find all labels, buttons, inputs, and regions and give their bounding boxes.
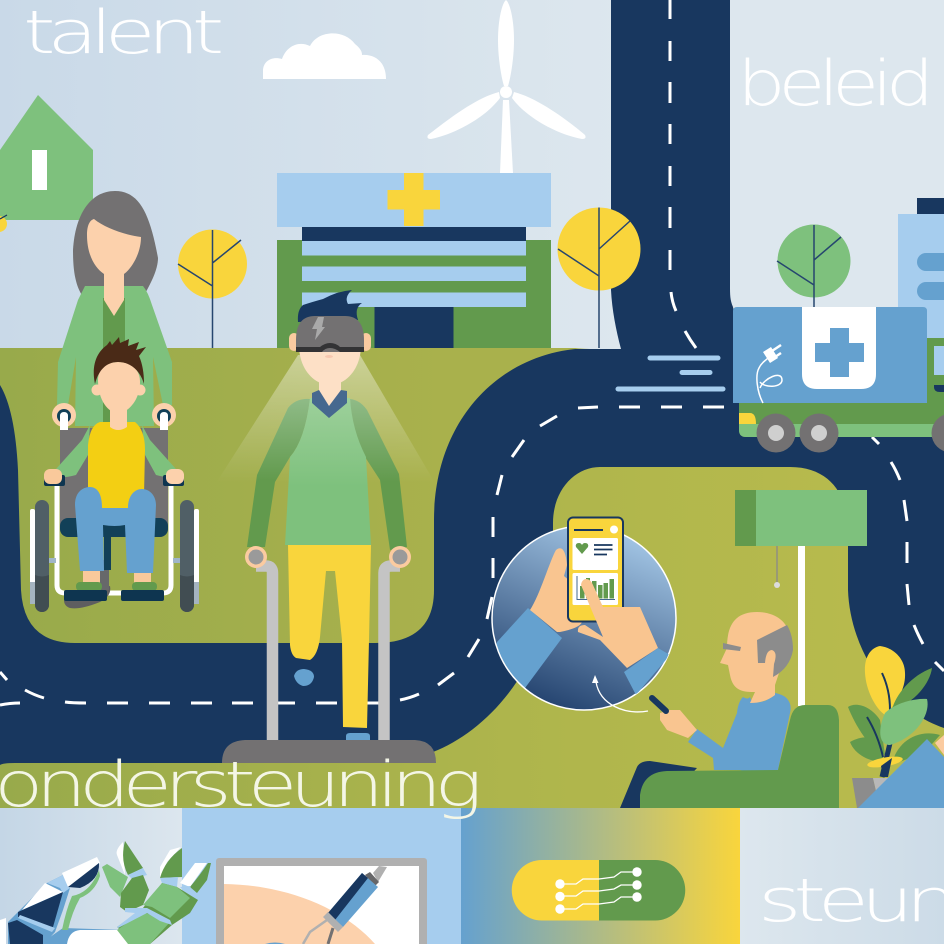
- carer hair: [73, 191, 158, 297]
- icon: electric plug: [757, 345, 782, 403]
- carer face: [87, 219, 141, 316]
- child neck and head: [92, 337, 146, 430]
- city building: [898, 198, 944, 344]
- head: [720, 612, 790, 703]
- sweater: [285, 398, 371, 545]
- icon: medical cross: [815, 328, 864, 377]
- carer and child in wheelchair: [30, 191, 199, 612]
- disc outline: [492, 526, 676, 710]
- left hand: [530, 548, 582, 632]
- elderly man in armchair: [620, 612, 839, 808]
- sky panel: [0, 0, 621, 349]
- hand with phone: [652, 698, 697, 738]
- carer jacket: [57, 286, 172, 426]
- hands on walker: [245, 546, 411, 568]
- pill capsule: [512, 860, 599, 920]
- glasses: [723, 643, 741, 651]
- icon: wind turbine: [427, 0, 586, 173]
- heading: ondersteuning: ondersteuning: [0, 748, 477, 821]
- truck wheels: [756, 414, 944, 452]
- bottom right figure corner: [858, 735, 944, 808]
- surgical instrument: [265, 866, 387, 944]
- right hand pointing: [578, 579, 658, 668]
- right sky panel: [730, 0, 944, 345]
- yellow trousers: [288, 545, 371, 728]
- lawn right and bottom: [0, 467, 944, 808]
- lawn left: [0, 348, 590, 643]
- icon: partial yellow tree: [0, 215, 7, 232]
- trouser leg: [620, 761, 697, 808]
- VR light cone: [216, 355, 435, 483]
- icon: green house: [0, 95, 93, 220]
- truck chassis: [739, 403, 944, 437]
- truck box: [733, 307, 927, 403]
- bar chart: [577, 576, 615, 600]
- skin tissue: [224, 884, 375, 944]
- hair: [298, 290, 362, 322]
- icon: cloud: [263, 33, 386, 79]
- child arms: [56, 425, 176, 477]
- neck and collar: [312, 375, 347, 418]
- icon: heart: [576, 543, 588, 554]
- monitor: [216, 858, 427, 944]
- electric ambulance truck: [733, 307, 944, 452]
- icon: yellow tree left: [178, 230, 247, 348]
- arrow from phone to magnifier: [592, 675, 648, 712]
- walker base: [222, 740, 436, 763]
- heading: steun: steun: [758, 866, 944, 936]
- icon: hospital cross: [388, 173, 440, 226]
- smartphone health app magnifier: [490, 518, 676, 712]
- floor lamp: [735, 490, 867, 706]
- phone: [568, 518, 623, 622]
- panel: left sky tile: [0, 808, 182, 944]
- panel: robotic surgery screen: [182, 808, 461, 944]
- white cross panel: [802, 307, 876, 389]
- VR headset: [296, 316, 364, 352]
- icon: yellow tree right: [558, 208, 640, 348]
- person with VR headset and walker: [216, 290, 436, 763]
- grey hair: [757, 625, 793, 677]
- left sleeve: [247, 399, 310, 547]
- prosthetic foot and shoe: [294, 669, 370, 741]
- icon: lightning bolt: [312, 317, 325, 340]
- child hands and armrests: [44, 469, 184, 486]
- road centre dashes: [0, 0, 944, 705]
- right sleeve: [624, 648, 670, 695]
- walker poles: [256, 566, 400, 745]
- heading: beleid: beleid: [737, 47, 927, 120]
- wheelchair back: [60, 428, 168, 528]
- wheelchair handles: [52, 403, 176, 430]
- sweater: [688, 693, 791, 773]
- armchair: [640, 705, 839, 808]
- truck cab: [925, 338, 944, 404]
- child shirt: [88, 422, 145, 509]
- lower palm: [0, 870, 135, 944]
- hospital building: [277, 173, 551, 348]
- right sleeve: [350, 399, 407, 550]
- child legs: [75, 487, 156, 573]
- wheelchair shadow: [64, 586, 110, 608]
- icon: green tree: [777, 224, 850, 308]
- robot thumb: [8, 857, 100, 944]
- circuit lines: [555, 867, 642, 914]
- magnifier disc: [492, 526, 676, 710]
- wheelchair wheels: [30, 500, 199, 612]
- left sleeve: [490, 608, 562, 688]
- robot fingers: [102, 841, 211, 944]
- child feet: [64, 568, 164, 601]
- panel: steun: [740, 808, 944, 944]
- wheelchair frame: [57, 486, 171, 593]
- panel: smart pill: [461, 808, 740, 944]
- potted plant: [848, 646, 940, 808]
- head: [289, 325, 371, 385]
- robotic hand: [0, 841, 211, 944]
- heading: talent: talent: [23, 0, 221, 68]
- speed lines: [618, 358, 723, 389]
